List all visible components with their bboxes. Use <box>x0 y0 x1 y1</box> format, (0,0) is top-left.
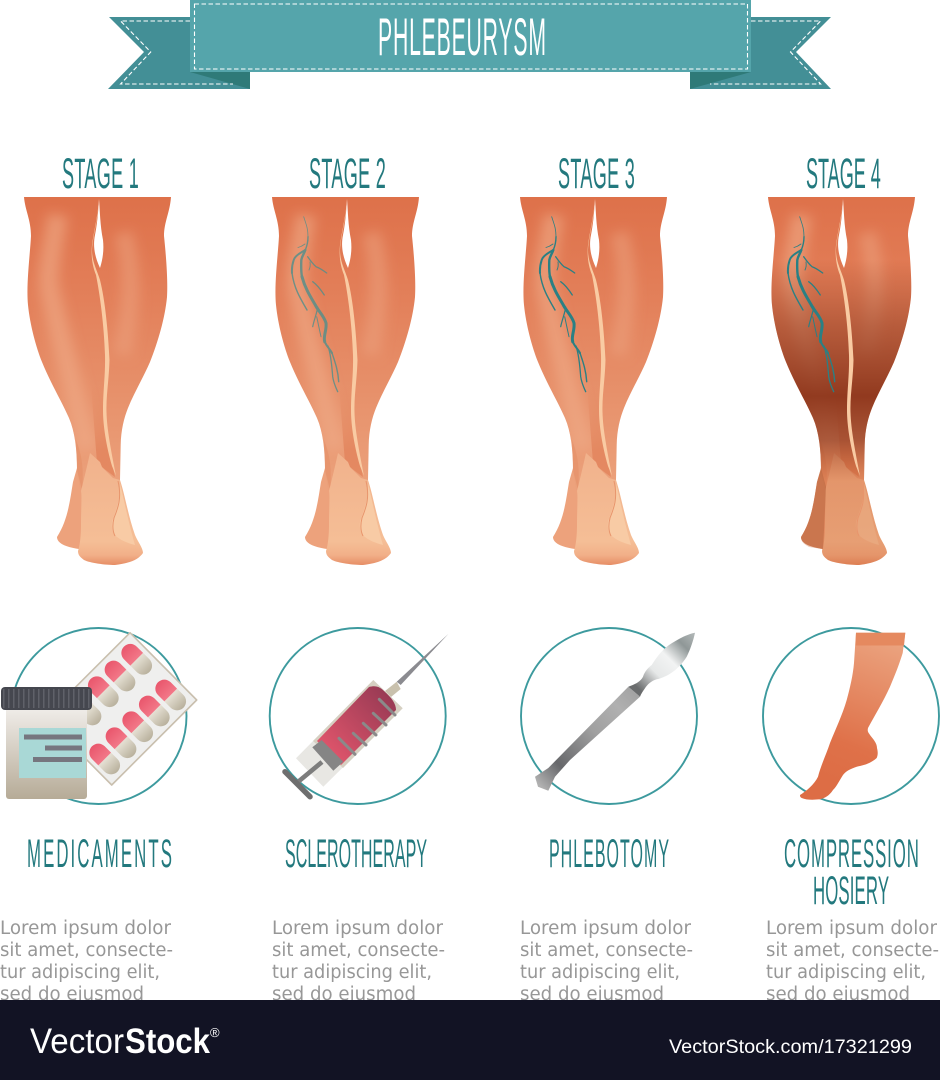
treatment icon: compression stocking <box>763 628 939 804</box>
body text: compression hosiery: tur adipiscing elit, <box>766 962 926 983</box>
body text: phlebotomy: tur adipiscing elit, <box>520 962 680 983</box>
main title: PHLEBEURYSM <box>378 6 546 67</box>
body text: phlebotomy: sit amet, consecte- <box>520 940 693 961</box>
footer logo: ® <box>210 1025 220 1040</box>
body text: sclerotherapy: Lorem ipsum dolor <box>272 918 443 939</box>
treatment icon: syringe <box>270 628 448 804</box>
footer url: VectorStock.com/17321299 <box>669 1036 912 1058</box>
circle <box>763 628 939 804</box>
body text: compression hosiery: Lorem ipsum dolor <box>766 918 937 939</box>
body text: sclerotherapy <box>272 918 445 1005</box>
scale ticks <box>339 699 395 754</box>
barrel <box>296 680 403 787</box>
body text: medicaments: sed do eiusmod <box>0 984 144 1005</box>
blade <box>628 633 695 697</box>
label: medicaments: MEDICAMENTS <box>27 832 172 876</box>
liquid <box>317 686 396 765</box>
body text: sclerotherapy: sed do eiusmod <box>272 984 416 1005</box>
footer logo <box>30 1022 220 1061</box>
legs: stage 1 <box>24 197 171 565</box>
body text: medicaments: sit amet, consecte- <box>0 940 173 961</box>
body text: sclerotherapy: tur adipiscing elit, <box>272 962 432 983</box>
label: phlebotomy: PHLEBOTOMY <box>549 832 669 876</box>
legs: stage 3 with veins <box>520 197 667 565</box>
stage 3 heading: STAGE 3 <box>558 149 635 197</box>
legs: stage 4 with dark skin and veins <box>768 197 915 565</box>
blister pack <box>45 633 197 785</box>
label: compression hosiery: HOSIERY <box>813 869 889 913</box>
ribbon main panel <box>190 0 751 72</box>
needle <box>397 634 448 685</box>
body text: phlebotomy <box>520 918 693 1005</box>
body text: sclerotherapy: sit amet, consecte- <box>272 940 445 961</box>
circle <box>10 628 186 804</box>
body text: compression hosiery: sed do eiusmod <box>766 984 910 1005</box>
body text: compression hosiery <box>766 918 939 1005</box>
pill jar <box>1 687 92 799</box>
treatment icon: scalpel <box>521 628 697 804</box>
stocking <box>800 633 905 800</box>
label: compression hosiery: COMPRESSION <box>784 832 919 876</box>
stocking band <box>856 633 905 646</box>
label: compression hosiery <box>784 832 919 913</box>
body text: medicaments: tur adipiscing elit, <box>0 962 160 983</box>
footer logo: Vector <box>30 1022 124 1061</box>
stage 1 heading: STAGE 1 <box>62 149 139 197</box>
circle <box>270 628 446 804</box>
ribbon left tail <box>108 17 250 89</box>
body text: phlebotomy: Lorem ipsum dolor <box>520 918 691 939</box>
legs: stage 2 with faint veins <box>272 197 419 565</box>
body text: medicaments: Lorem ipsum dolor <box>0 918 171 939</box>
title ribbon <box>108 0 831 89</box>
body text: compression hosiery: sit amet, consecte- <box>766 940 939 961</box>
footer bar <box>0 1000 940 1080</box>
ribbon right tail <box>690 17 831 89</box>
circle <box>521 628 697 804</box>
stage 4 heading: STAGE 4 <box>806 149 881 197</box>
body text: phlebotomy: sed do eiusmod <box>520 984 664 1005</box>
stage 2 heading: STAGE 2 <box>309 149 386 197</box>
plunger <box>312 740 343 771</box>
handle <box>535 687 640 791</box>
treatment icon: medicaments <box>1 628 197 804</box>
label: sclerotherapy: SCLEROTHERAPY <box>285 832 427 876</box>
body text: medicaments <box>0 918 173 1005</box>
footer logo: Stock <box>125 1022 210 1061</box>
